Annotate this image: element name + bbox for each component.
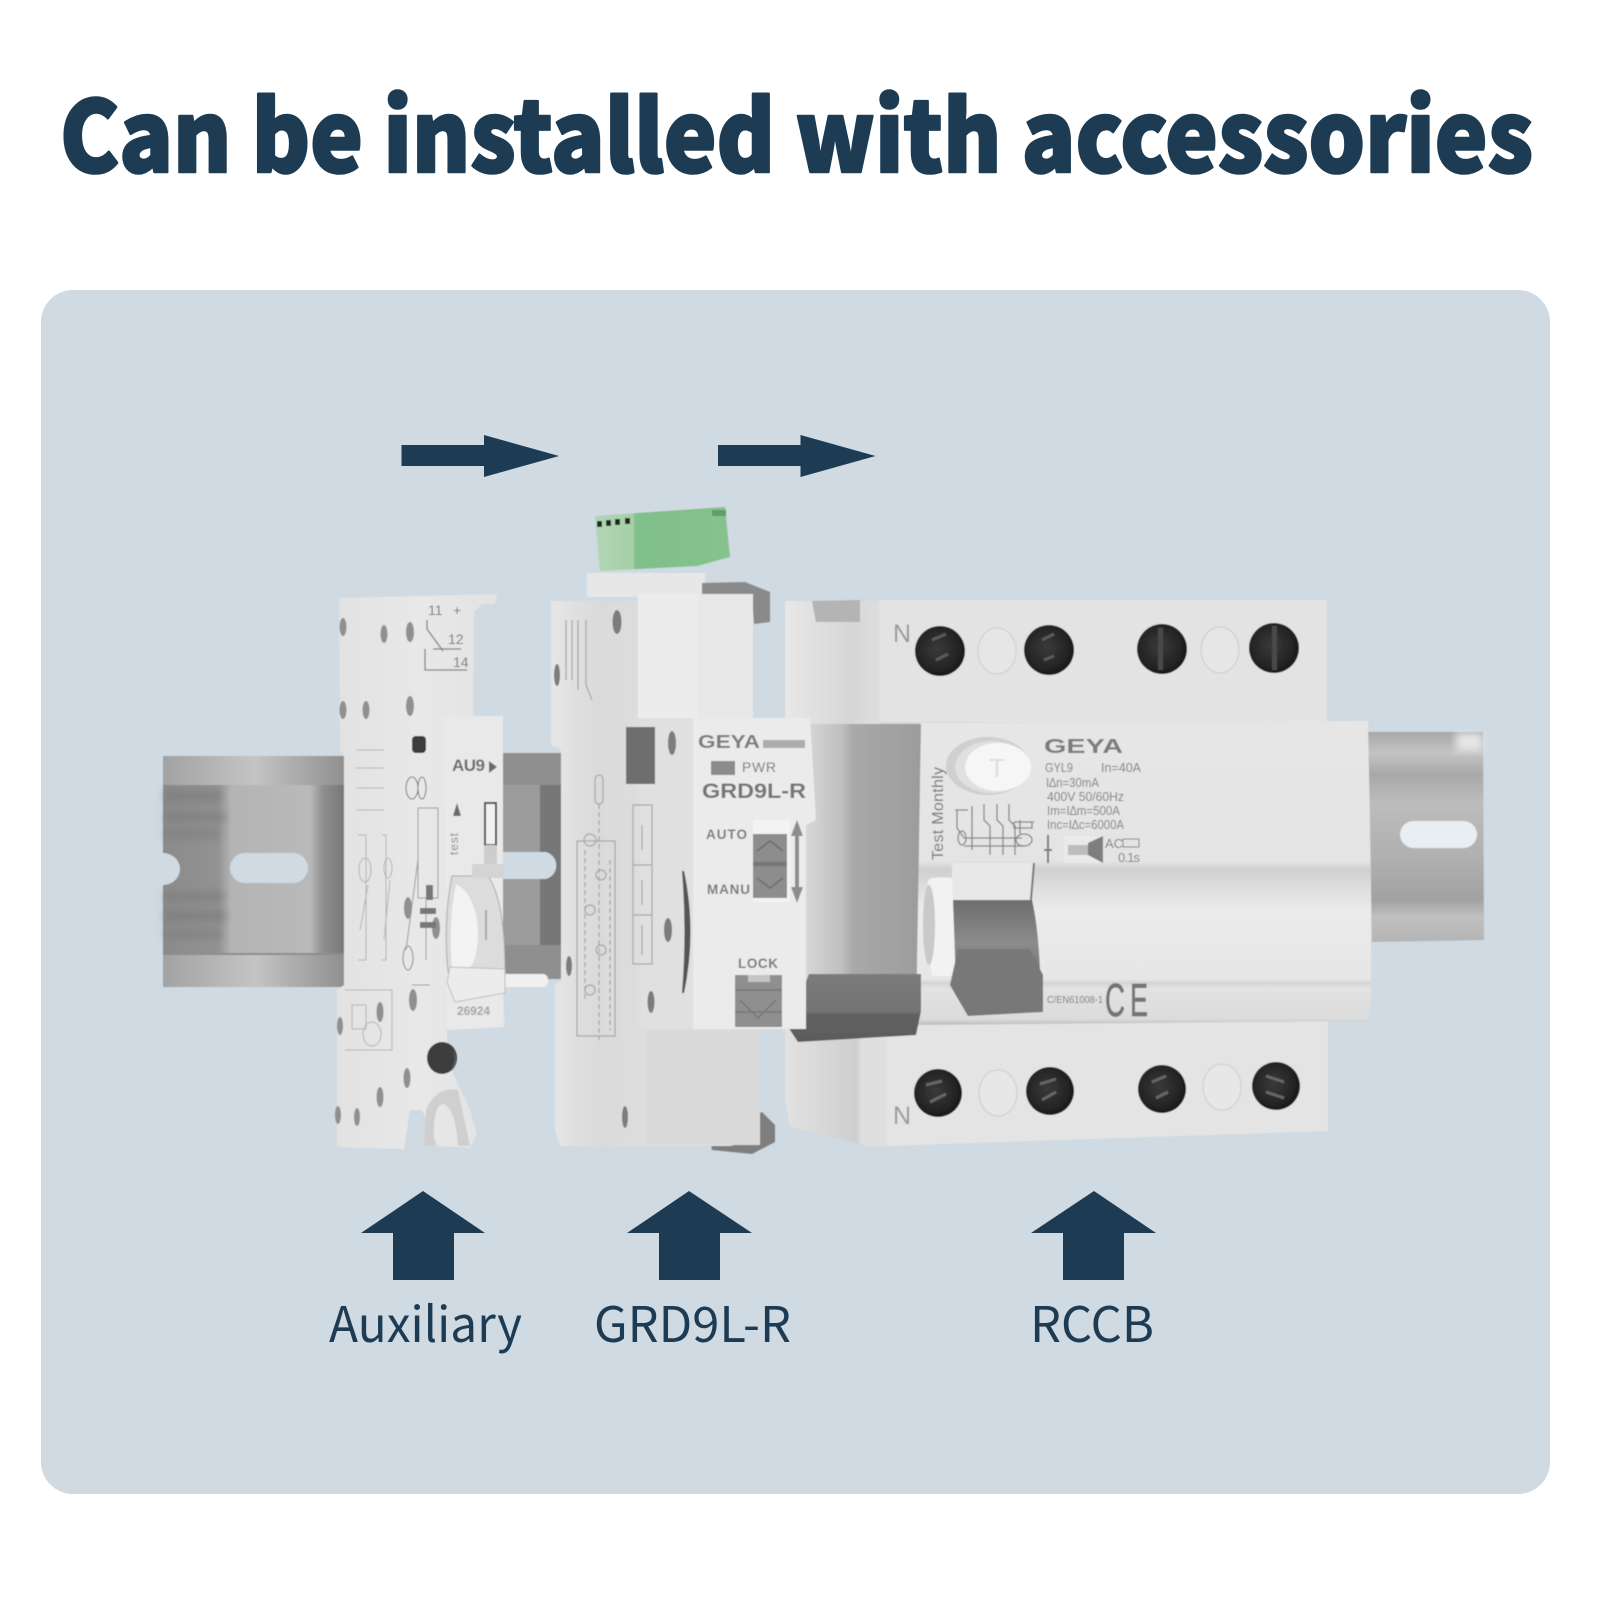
GRD dark window: [626, 727, 655, 784]
RCCB top notch: [812, 600, 860, 622]
RCCB type marks: AC: [1105, 836, 1123, 851]
GRD green connector: [595, 507, 730, 571]
RCCB ratings: GYL9: [1045, 760, 1073, 775]
RCCB top blank knockouts: [978, 627, 1239, 674]
GRD logo bar: [763, 740, 805, 748]
arrow: up to Auxiliary: [361, 1191, 485, 1280]
GRD rear body: [551, 601, 760, 1146]
arrow: up to RCCB: [1031, 1191, 1156, 1280]
product photo: DIN rail with modules: [163, 507, 1484, 1154]
auxiliary label: test: test: [447, 832, 461, 855]
GRD label: model: GRD9L-R: [702, 780, 806, 803]
RCCB bottom blank knockouts: [979, 1064, 1241, 1116]
label: RCCB: RCCB: [1030, 1286, 1154, 1357]
GRD front face: [640, 718, 816, 1029]
auxiliary front face: [444, 716, 503, 1030]
RCCB lower terminal block: [887, 1021, 1328, 1146]
RCCB CE mark: C: [1105, 974, 1125, 1026]
auxiliary pointer triangles: [453, 761, 497, 816]
auxiliary body: [337, 594, 505, 1149]
RCCB ratings: 400V 50/60Hz: [1047, 789, 1124, 804]
RCCB neutral marks: N: [893, 1102, 911, 1130]
GRD upper block: [638, 594, 753, 718]
GRD bottom clip: [709, 1112, 775, 1154]
RCCB indicator legend: [1044, 835, 1052, 863]
auxiliary schematic print: [345, 750, 438, 1050]
GRD label: PWR: PWR: [742, 759, 776, 775]
RCCB bottom terminal screws: [914, 1062, 1300, 1117]
GRD wiring print: [566, 620, 652, 1040]
DIN rail: middle segment: [500, 753, 563, 979]
auxiliary handle and pin: [447, 967, 548, 1002]
auxiliary wire clamp: [424, 1042, 470, 1146]
DIN rail: right segment: [1368, 732, 1484, 942]
GRD label: AUTO: AUTO: [706, 827, 747, 842]
RCCB indicator window: [1064, 836, 1103, 863]
GRD lock slider: [735, 975, 782, 1027]
auxiliary contact symbol: 14: [453, 654, 469, 670]
RCCB type marks: [1105, 836, 1140, 865]
GRD label: MANU: MANU: [707, 882, 750, 897]
RCCB test button: [946, 737, 1031, 795]
module: RCCB: [785, 600, 1371, 1146]
RCCB middle body: [916, 721, 1371, 1025]
RCCB ratings: Inc=I∆c=6000A: [1047, 817, 1124, 832]
RCCB neutral marks: [893, 620, 911, 1130]
RCCB CE mark: E: [1130, 974, 1148, 1026]
module: Auxiliary contact: [335, 594, 548, 1149]
auxiliary contact symbol: 12: [448, 631, 464, 647]
RCCB upper side panel: [785, 601, 879, 724]
auxiliary contact symbol: 11: [428, 602, 443, 618]
panel: background: [41, 290, 1550, 1494]
RCCB middle side panel: [785, 724, 921, 1021]
label: Auxiliary: Auxiliary: [329, 1286, 522, 1357]
GRD mounting holes: [554, 610, 676, 1128]
arrow: up to GRD9L-R: [627, 1191, 752, 1280]
RCCB ratings: [1045, 760, 1141, 832]
module: GRD9L-R: [551, 507, 816, 1154]
RCCB test button: T: [989, 753, 1005, 783]
RCCB ratings: I∆n=30mA: [1046, 775, 1099, 790]
GRD power window: [711, 761, 735, 775]
auxiliary test window: [484, 803, 497, 871]
RCCB lower side panel: [785, 1021, 887, 1146]
RCCB dark block: [788, 974, 921, 1042]
RCCB ratings: Im=I∆m=500A: [1047, 803, 1120, 818]
GRD lower right block: [647, 1029, 760, 1145]
RCCB type marks: 0.1s: [1118, 850, 1140, 865]
GRD label: LOCK: LOCK: [738, 956, 778, 971]
RCCB neutral marks: N: [893, 620, 911, 648]
GRD crescent slot: [683, 871, 690, 993]
GRD double arrow: [791, 820, 803, 903]
RCCB top terminal screws: [915, 623, 1299, 676]
auxiliary label: part number: 26924: [457, 1004, 490, 1018]
GRD collar: [587, 573, 705, 597]
auxiliary square slot: [412, 736, 426, 753]
RCCB logo: GEYA: [1044, 736, 1123, 758]
arrow: right between auxiliary and GRD9L-R: [402, 435, 559, 477]
DIN rail: left segment: [163, 756, 347, 987]
auxiliary contact symbol: [425, 602, 469, 670]
arrow: right between GRD9L-R and RCCB: [718, 435, 876, 477]
RCCB ratings: In=40A: [1101, 760, 1141, 775]
RCCB standard text: C/EN61008-1: [1047, 994, 1103, 1006]
auxiliary latch: [446, 864, 505, 972]
auxiliary label: AU9: AU9: [452, 756, 485, 775]
RCCB toggle surround: [923, 863, 1034, 976]
GRD top clip: [702, 582, 770, 624]
GRD logo: GEYA: [698, 732, 760, 752]
GRD mode slider: [753, 820, 790, 902]
RCCB upper terminal block: [879, 600, 1327, 722]
auxiliary mounting holes: [335, 618, 440, 1126]
RCCB toggle lever: [950, 900, 1043, 1016]
RCCB text: Test Monthly: Test Monthly: [930, 767, 947, 860]
RCCB circuit diagram: [955, 804, 1034, 855]
label: GRD9L-R: GRD9L-R: [594, 1286, 791, 1357]
auxiliary contact symbol: +: [453, 602, 461, 618]
